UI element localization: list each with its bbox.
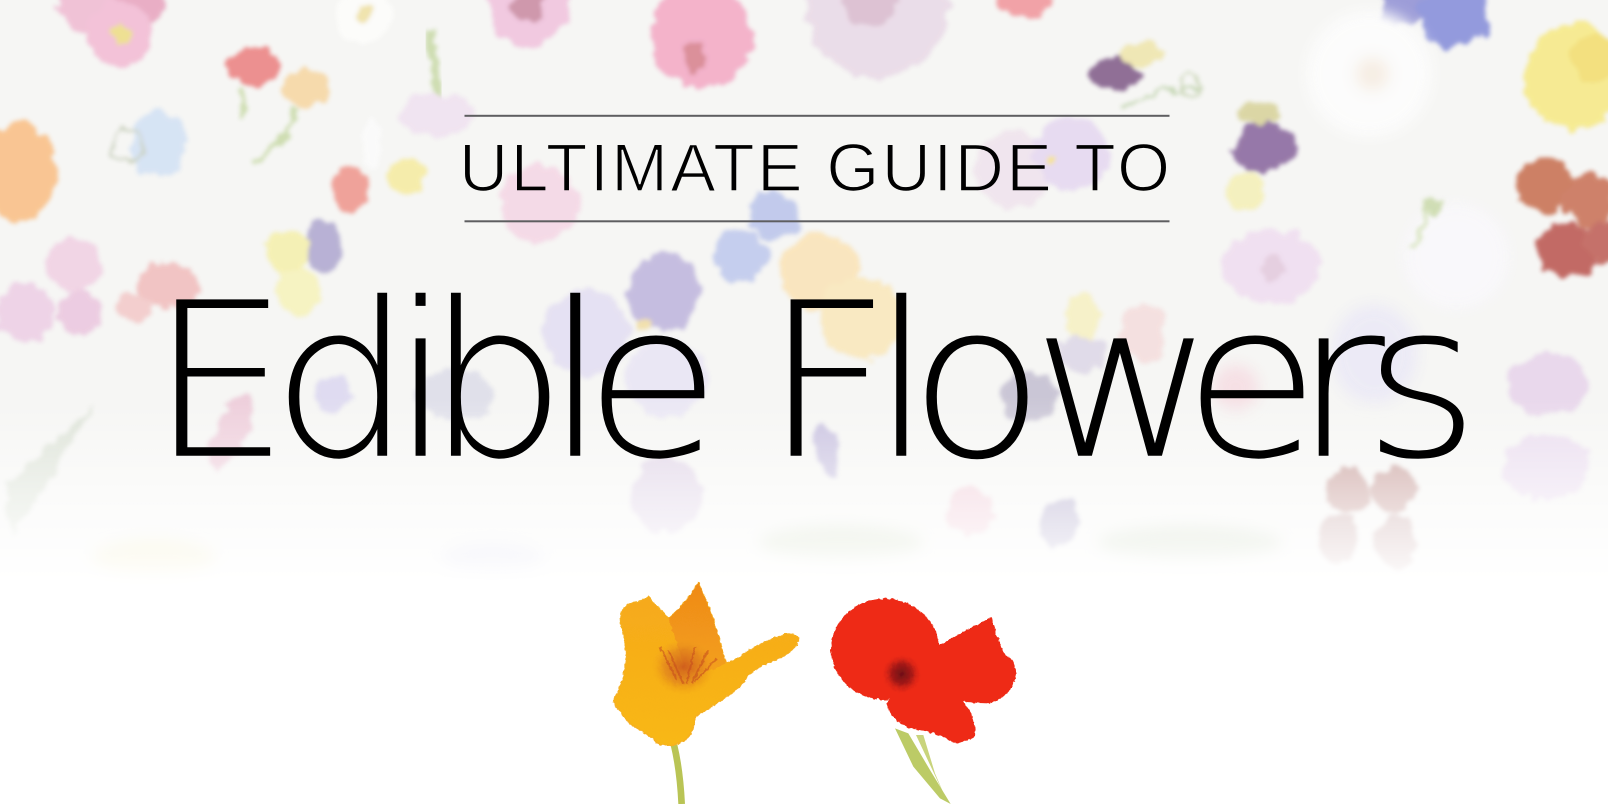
flower: pale pink (361, 94, 475, 166)
flower: rose pink carnation (649, 0, 752, 88)
flower: purple and yellow pansy (1228, 103, 1294, 212)
flower: purple and yellow pansy left (265, 219, 343, 315)
flower: yellow lilac cluster (1055, 291, 1166, 370)
subtitle text: ULTIMATE GUIDE TO (459, 130, 1170, 206)
flower: pink carnation behind heading (499, 164, 577, 242)
nasturtium flowers (613, 583, 1016, 804)
flower: coral top (997, 0, 1054, 16)
flower: pink bloom (487, 0, 569, 46)
flower: red-brown pansy (1517, 157, 1608, 276)
icon: green stem (429, 31, 439, 103)
flower: coral carnation (115, 263, 202, 321)
icon: yellow flower stem (674, 745, 682, 804)
top rule (464, 115, 1170, 117)
flower: yellow pansy (1525, 24, 1608, 130)
flower: pale pink left (200, 387, 264, 475)
icon: red nasturtium (831, 599, 1016, 743)
flower: white-lavender pansy with bud (1403, 203, 1510, 310)
flower: purple petal (809, 421, 844, 478)
bottom rule (464, 220, 1170, 222)
flower: lilac dahlia (805, 0, 949, 77)
flower: orange bloom (781, 233, 902, 359)
flower: pink daisies top left (58, 0, 165, 66)
flower: purple pansy (544, 253, 708, 416)
flower: lilac right (1502, 354, 1590, 499)
flower: red and yellow nasturtium (227, 48, 332, 164)
flower: brown pansy fading (1320, 468, 1417, 568)
photo background panel (0, 0, 1608, 600)
flower: dark purple sprig (1090, 42, 1201, 108)
flower: red and yellow small (332, 158, 426, 211)
background flowers scattered (0, 0, 1608, 577)
flower: pale lilac pansy (974, 117, 1109, 208)
flower: blue cornflower (1380, 0, 1489, 47)
flower: white dahlia (1305, 10, 1433, 137)
icon: yellow nasturtium (613, 583, 799, 745)
flower: grey purple (1000, 373, 1057, 423)
flower: blue cornflower center (714, 191, 799, 283)
flower: pale lilac right of title (1213, 305, 1417, 410)
flower: orange left edge (0, 123, 57, 222)
white lower panel (0, 593, 1608, 804)
flower: pale purple (946, 489, 1085, 553)
flower: white daisy (335, 0, 393, 44)
white fade overlay (0, 395, 1608, 593)
flower: lilac carnation (0, 238, 103, 341)
flower: lilac sprig behind title (315, 370, 495, 419)
icon: faded leaves bottom (92, 527, 1282, 577)
main title: Edible Flowers (149, 257, 1480, 507)
flower: lilac thistle (632, 455, 701, 533)
flower: pale blue with tendril (113, 111, 187, 176)
icon: red flower stem (895, 728, 951, 804)
icon: green bud (1410, 199, 1442, 251)
flower: pale pink pansy (1222, 230, 1321, 304)
icon: green leaves (8, 405, 97, 533)
